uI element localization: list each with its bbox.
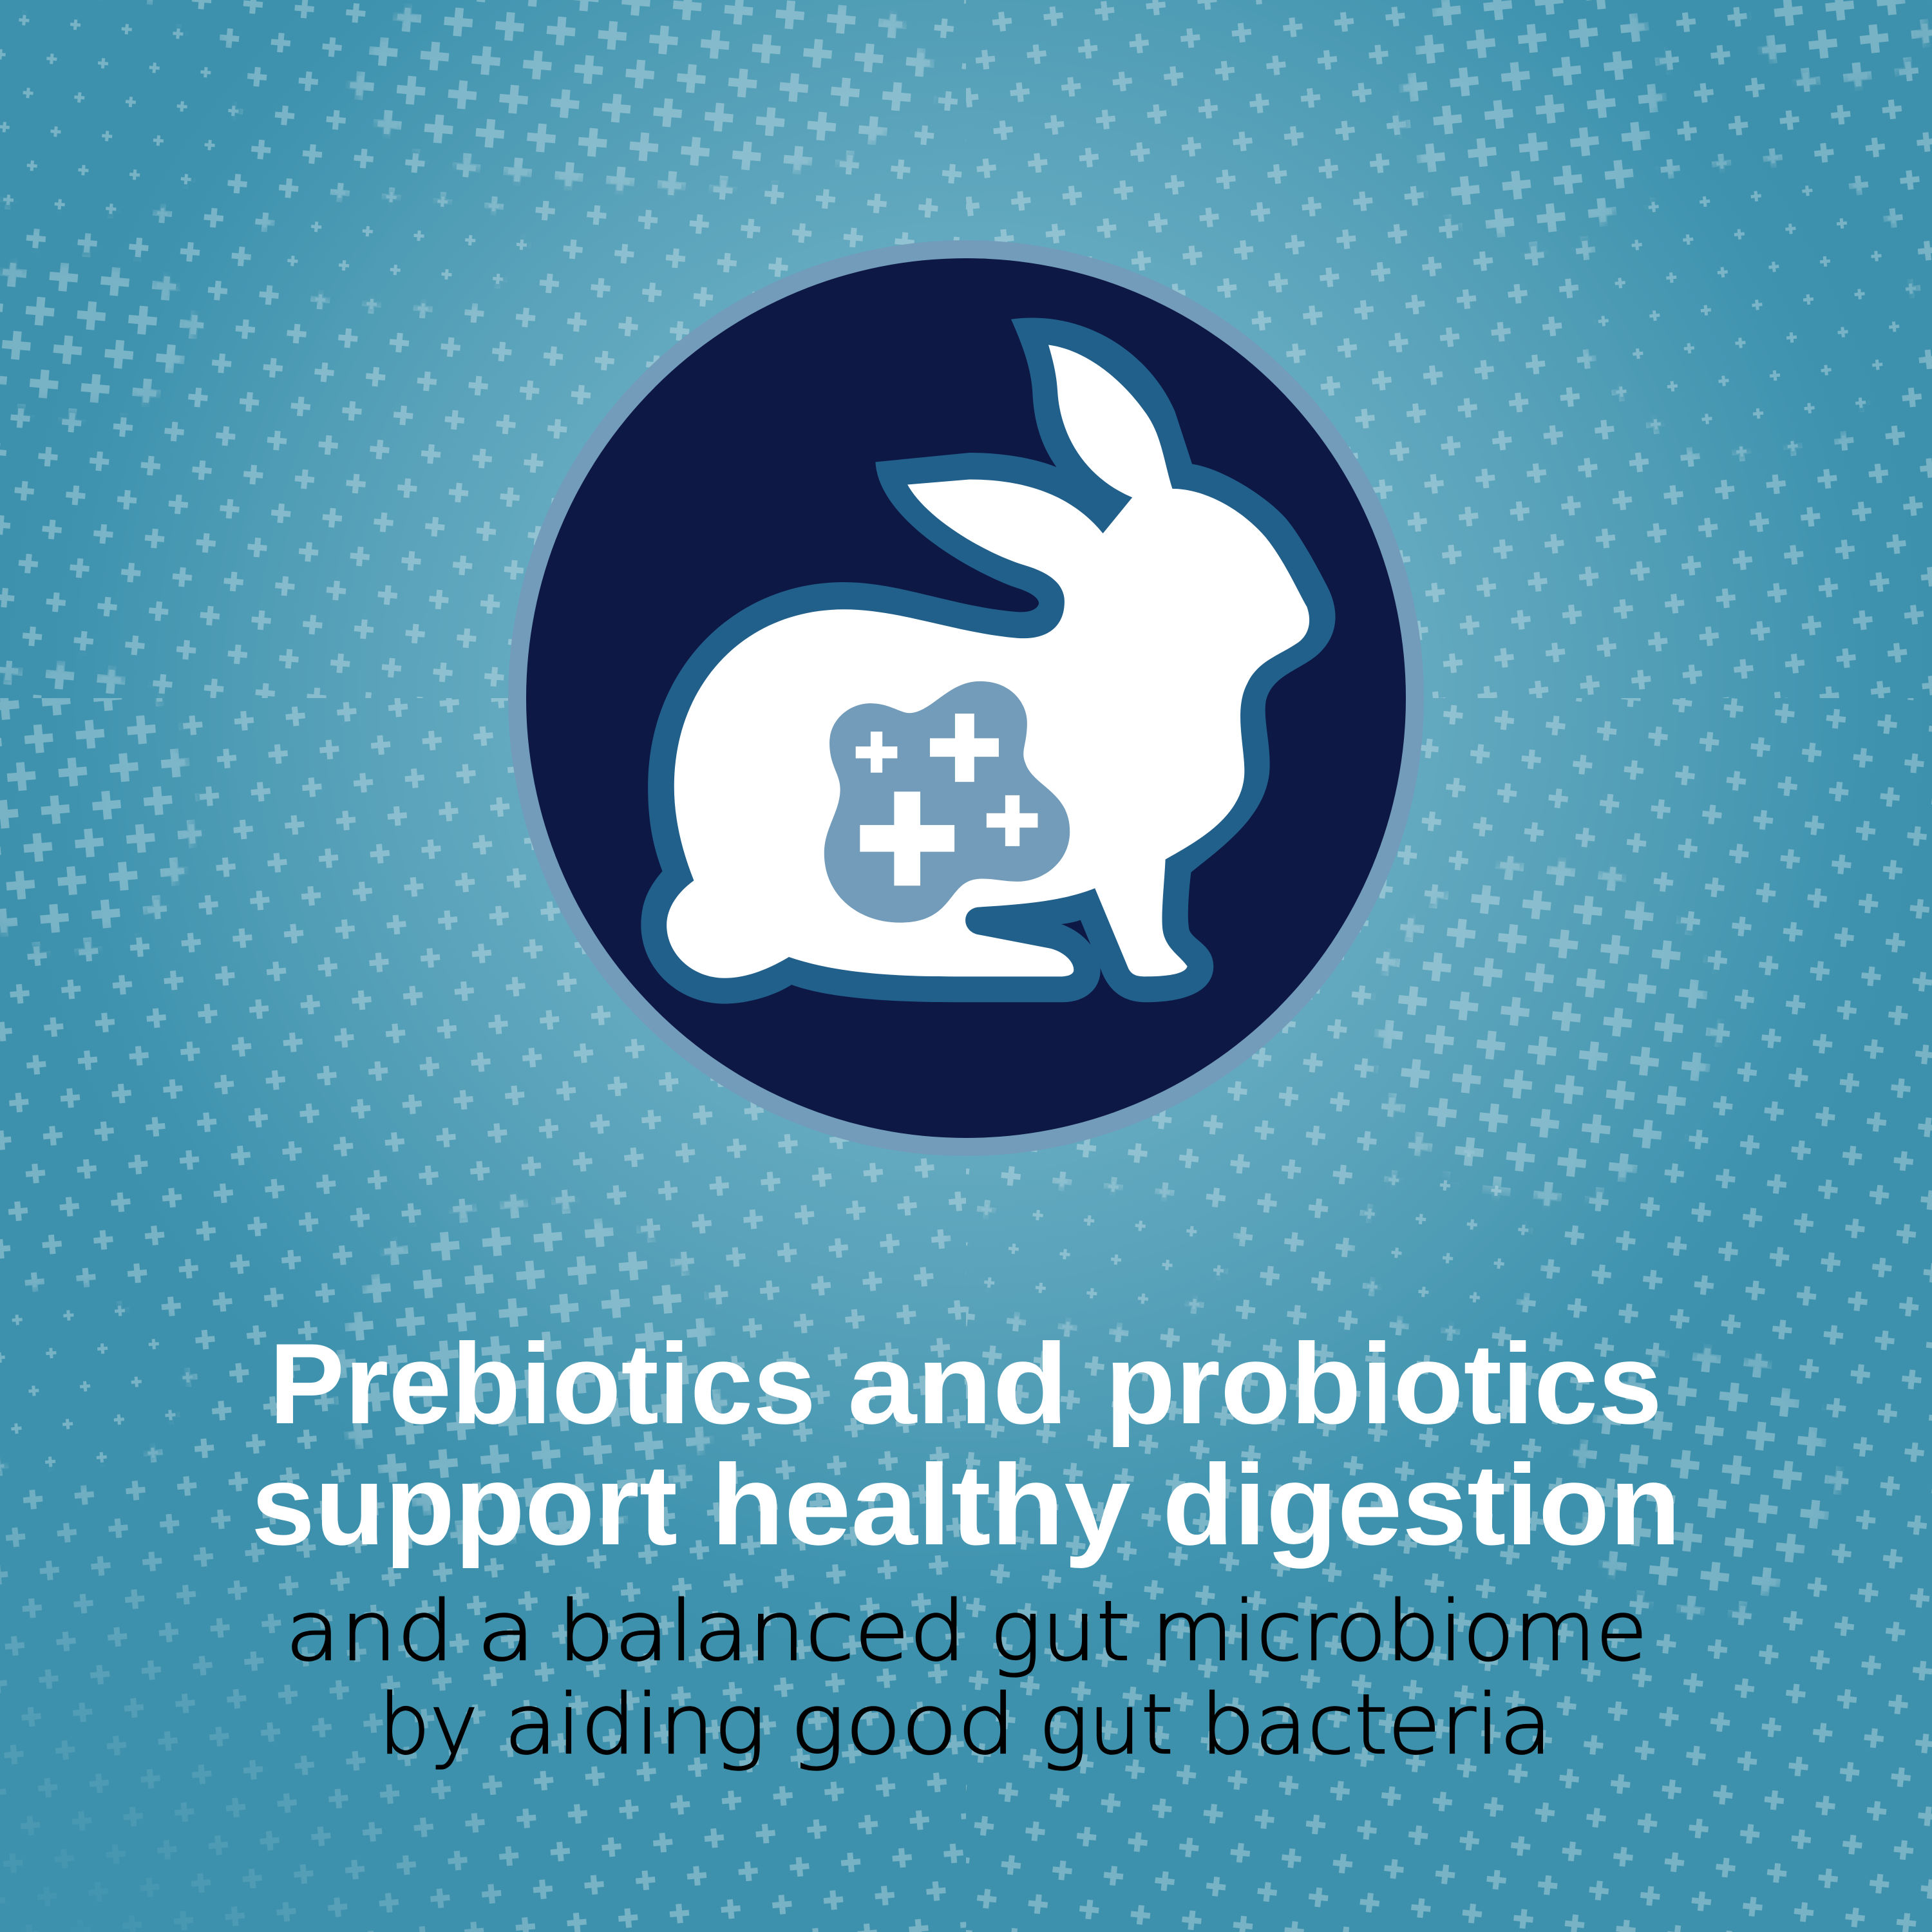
- heading line 1: Prebiotics: [269, 1320, 816, 1448]
- heading: [251, 1320, 1681, 1569]
- subheading line 1: and: [285, 1584, 454, 1680]
- heading line 2: digestion: [1162, 1441, 1681, 1569]
- subheading line 2: [379, 1677, 1552, 1773]
- circle disc: [526, 258, 1406, 1138]
- gut microbiome blob: [824, 681, 1070, 923]
- rabbit body: [667, 345, 1309, 978]
- subheading line 1: gut: [990, 1584, 1130, 1680]
- heading line 2: [251, 1441, 1681, 1569]
- subheading line 1: a: [477, 1584, 536, 1680]
- heading line 2: support: [251, 1441, 677, 1569]
- icon: rabbit in circle badge: [508, 240, 1424, 1156]
- circle ring: [508, 240, 1424, 1156]
- gap between legs: [1061, 920, 1091, 945]
- heading line 1: [269, 1320, 1662, 1448]
- subheading line 1: microbiome: [1151, 1584, 1647, 1680]
- heading line 2: healthy: [711, 1441, 1131, 1569]
- heading line 1: and: [848, 1320, 1068, 1448]
- subheading line 1: balanced: [558, 1584, 966, 1680]
- subheading line 2: gut: [1039, 1677, 1173, 1773]
- subheading line 2: by: [379, 1677, 478, 1773]
- subheading line 2: good: [790, 1677, 1016, 1773]
- subheading line 1: [285, 1584, 1647, 1680]
- subheading line 2: aiding: [504, 1677, 766, 1773]
- heading line 1: probiotics: [1105, 1320, 1662, 1448]
- icon: rabbit: [641, 317, 1336, 1004]
- plus signs: [856, 714, 1037, 886]
- rabbit outline: [641, 317, 1336, 1004]
- subheading line 2: bacteria: [1200, 1677, 1552, 1773]
- subheading: [285, 1584, 1647, 1773]
